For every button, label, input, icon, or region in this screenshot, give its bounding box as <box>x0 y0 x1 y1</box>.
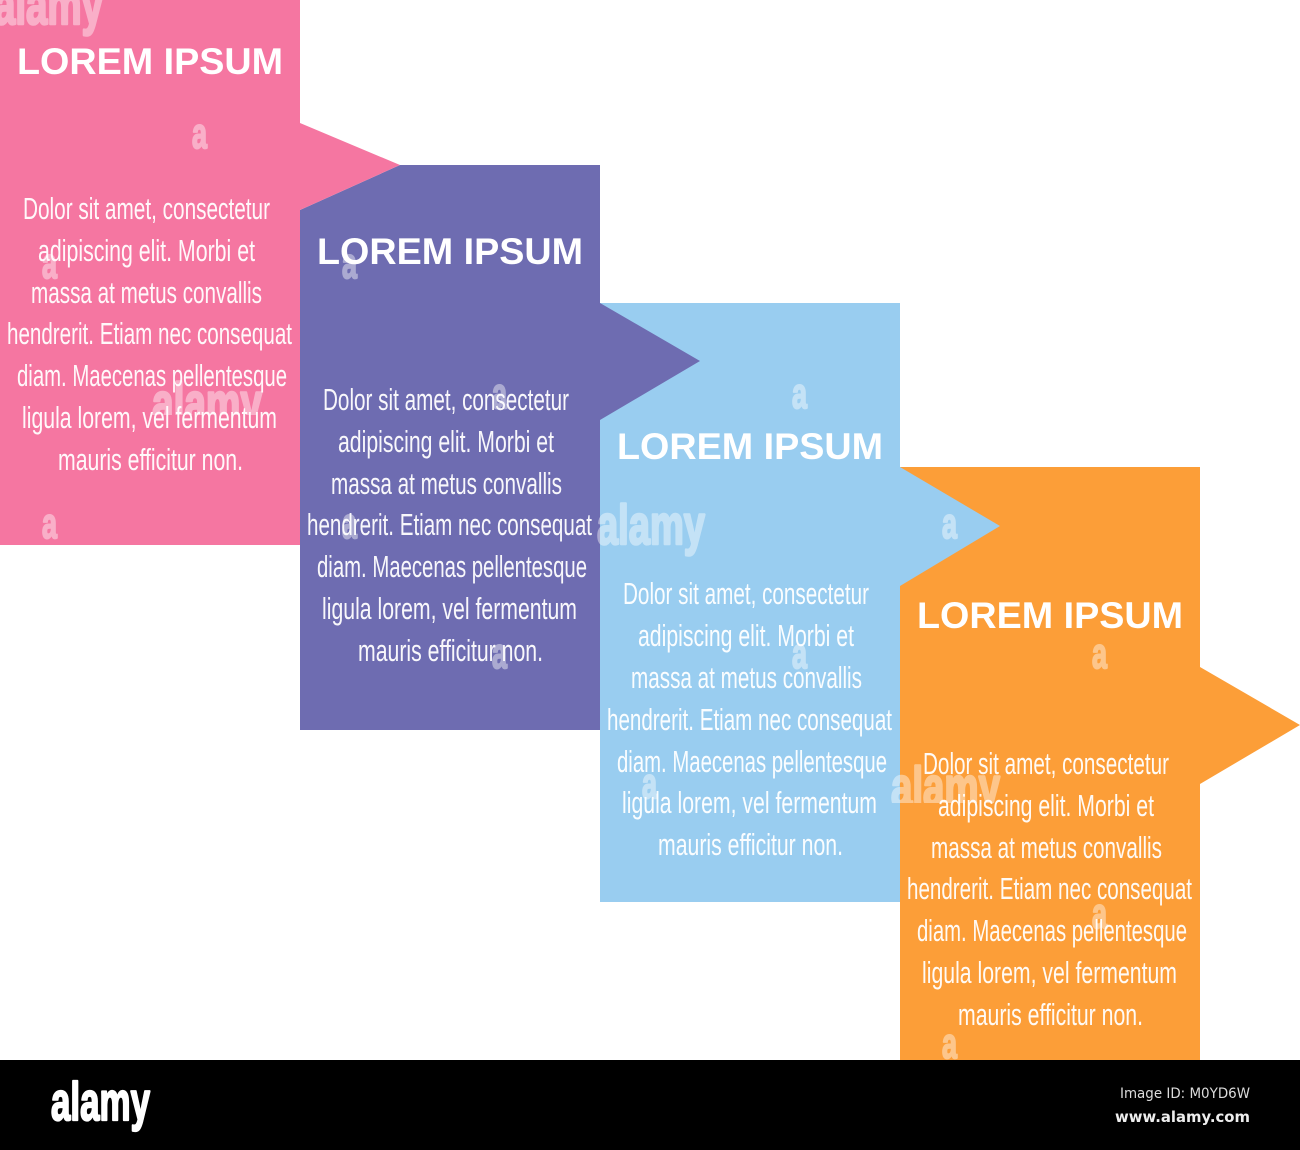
purple arrow shape <box>300 165 700 730</box>
text block: orange: adipiscing elit. Morbi et <box>938 788 1154 823</box>
watermarks: alamy <box>891 755 1000 818</box>
text block: pink: diam. Maecenas pellentesque <box>17 358 287 393</box>
watermarks: a <box>342 500 358 548</box>
text block: pink: Dolor sit amet, consectetur <box>23 191 270 226</box>
text block: blue: hendrerit. Etiam nec consequat <box>607 702 892 737</box>
watermarks: a <box>492 630 508 678</box>
watermarks: a <box>942 1020 958 1068</box>
text block: orange: massa at metus convallis <box>931 830 1162 865</box>
footer bar <box>0 1060 1300 1150</box>
text block: blue: mauris efficitur non. <box>658 827 843 862</box>
panel: orange step <box>900 467 1300 1060</box>
watermarks: a <box>42 240 58 288</box>
watermarks: a <box>342 240 358 288</box>
text block: blue: diam. Maecenas pellentesque <box>617 744 887 779</box>
text block: blue: adipiscing elit. Morbi et <box>638 618 854 653</box>
text block: purple: diam. Maecenas pellentesque <box>317 549 587 584</box>
text block: purple: massa at metus convallis <box>331 466 562 501</box>
orange arrow shape <box>900 467 1300 1060</box>
watermarks: alamy <box>152 371 262 434</box>
watermarks: a <box>192 110 208 158</box>
watermarks <box>0 0 1108 1068</box>
watermarks: a <box>1092 630 1108 678</box>
text block: pink: ligula lorem, vel fermentum <box>22 400 277 435</box>
heading: pink: LOREM IPSUM <box>17 41 283 82</box>
heading: blue: LOREM IPSUM <box>617 426 883 467</box>
text block: pink <box>7 191 292 477</box>
panel: blue step <box>600 303 1000 902</box>
watermarks: a <box>492 370 508 418</box>
text block: orange: Dolor sit amet, consectetur <box>923 746 1169 781</box>
text block: blue: ligula lorem, vel fermentum <box>622 785 877 820</box>
text block: purple: adipiscing elit. Morbi et <box>338 424 554 459</box>
text block: blue <box>607 576 892 862</box>
text block: purple: Dolor sit amet, consectetur <box>323 382 569 417</box>
text block: pink: massa at metus convallis <box>31 275 262 310</box>
watermarks: a <box>792 630 808 678</box>
watermarks: a <box>942 500 958 548</box>
watermarks: a <box>792 370 808 418</box>
watermarks: a <box>642 760 658 808</box>
text block: pink: adipiscing elit. Morbi et <box>38 233 255 268</box>
panel: purple step <box>300 165 700 730</box>
text block: orange: mauris efficitur non. <box>958 997 1143 1032</box>
watermarks: a <box>42 500 58 548</box>
text block: orange: ligula lorem, vel fermentum <box>922 955 1177 990</box>
text block: purple: ligula lorem, vel fermentum <box>322 591 577 626</box>
footer logo: alamy <box>51 1072 150 1132</box>
watermarks: a <box>1092 890 1108 938</box>
text block: purple: mauris efficitur non. <box>358 633 543 668</box>
text block: blue: Dolor sit amet, consectetur <box>623 576 869 611</box>
heading: orange: LOREM IPSUM <box>917 595 1183 636</box>
text block: pink: mauris efficitur non. <box>58 442 243 477</box>
image id: Image ID: M0YD6W <box>1120 1086 1250 1102</box>
blue arrow shape <box>600 303 1000 902</box>
text block: blue: massa at metus convallis <box>631 660 862 695</box>
text block: purple: hendrerit. Etiam nec consequat <box>307 507 592 542</box>
text block: purple <box>307 382 592 668</box>
panel: pink step <box>0 0 400 545</box>
text block: pink: hendrerit. Etiam nec consequat <box>7 316 292 351</box>
watermarks: alamy <box>597 493 705 556</box>
pink arrow shape <box>0 0 400 545</box>
text block: orange <box>907 746 1192 1032</box>
heading: purple: LOREM IPSUM <box>317 231 583 272</box>
website: www.alamy.com <box>1115 1108 1250 1126</box>
